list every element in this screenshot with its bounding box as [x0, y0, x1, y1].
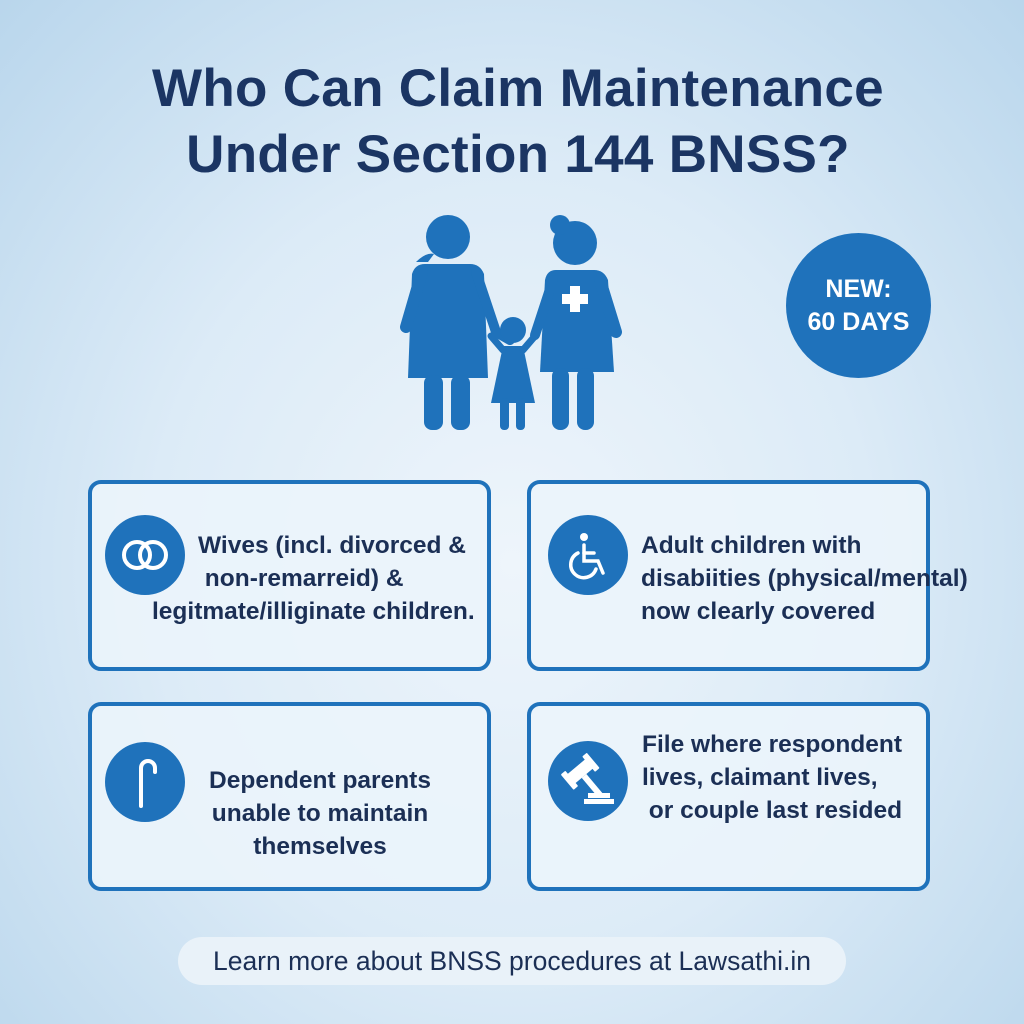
text: non-remarreid) & [205, 565, 404, 592]
text: Adult children with [641, 532, 862, 559]
badge: new 60 days: NEW: [825, 275, 892, 303]
text: Dependent parents [209, 767, 431, 794]
title: Under Section 144 BNSS? [186, 125, 850, 184]
icon: rings [105, 515, 185, 595]
text: lives, claimant lives, [642, 764, 878, 791]
text: Wives (incl. divorced & [198, 532, 466, 559]
text: or couple last resided [649, 797, 902, 824]
text: disabiities (physical/mental) [641, 565, 968, 592]
text [642, 731, 902, 824]
text: now clearly covered [641, 598, 875, 625]
text: themselves [253, 833, 387, 860]
badge: new 60 days [786, 233, 931, 378]
footer link [178, 937, 846, 985]
panel: dependent parents [88, 702, 491, 891]
panel: wives and children [88, 480, 491, 671]
icon: wheelchair [548, 515, 628, 595]
panel: where to file [527, 702, 930, 891]
title: Who Can Claim Maintenance [152, 59, 884, 118]
title [152, 59, 884, 184]
text: legitmate/illiginate children. [152, 598, 475, 625]
text: File where respondent [642, 731, 902, 758]
badge: new 60 days: 60 DAYS [808, 308, 909, 336]
icon: gavel [548, 741, 628, 821]
text [152, 532, 475, 625]
text [641, 532, 968, 625]
panel: disabled adult children [527, 480, 930, 671]
text [209, 767, 431, 860]
icon: cane [105, 742, 185, 822]
footer link: Learn more about BNSS procedures at Lawsathi.in [213, 946, 811, 976]
icon: family [400, 215, 622, 430]
text: unable to maintain [212, 800, 428, 827]
